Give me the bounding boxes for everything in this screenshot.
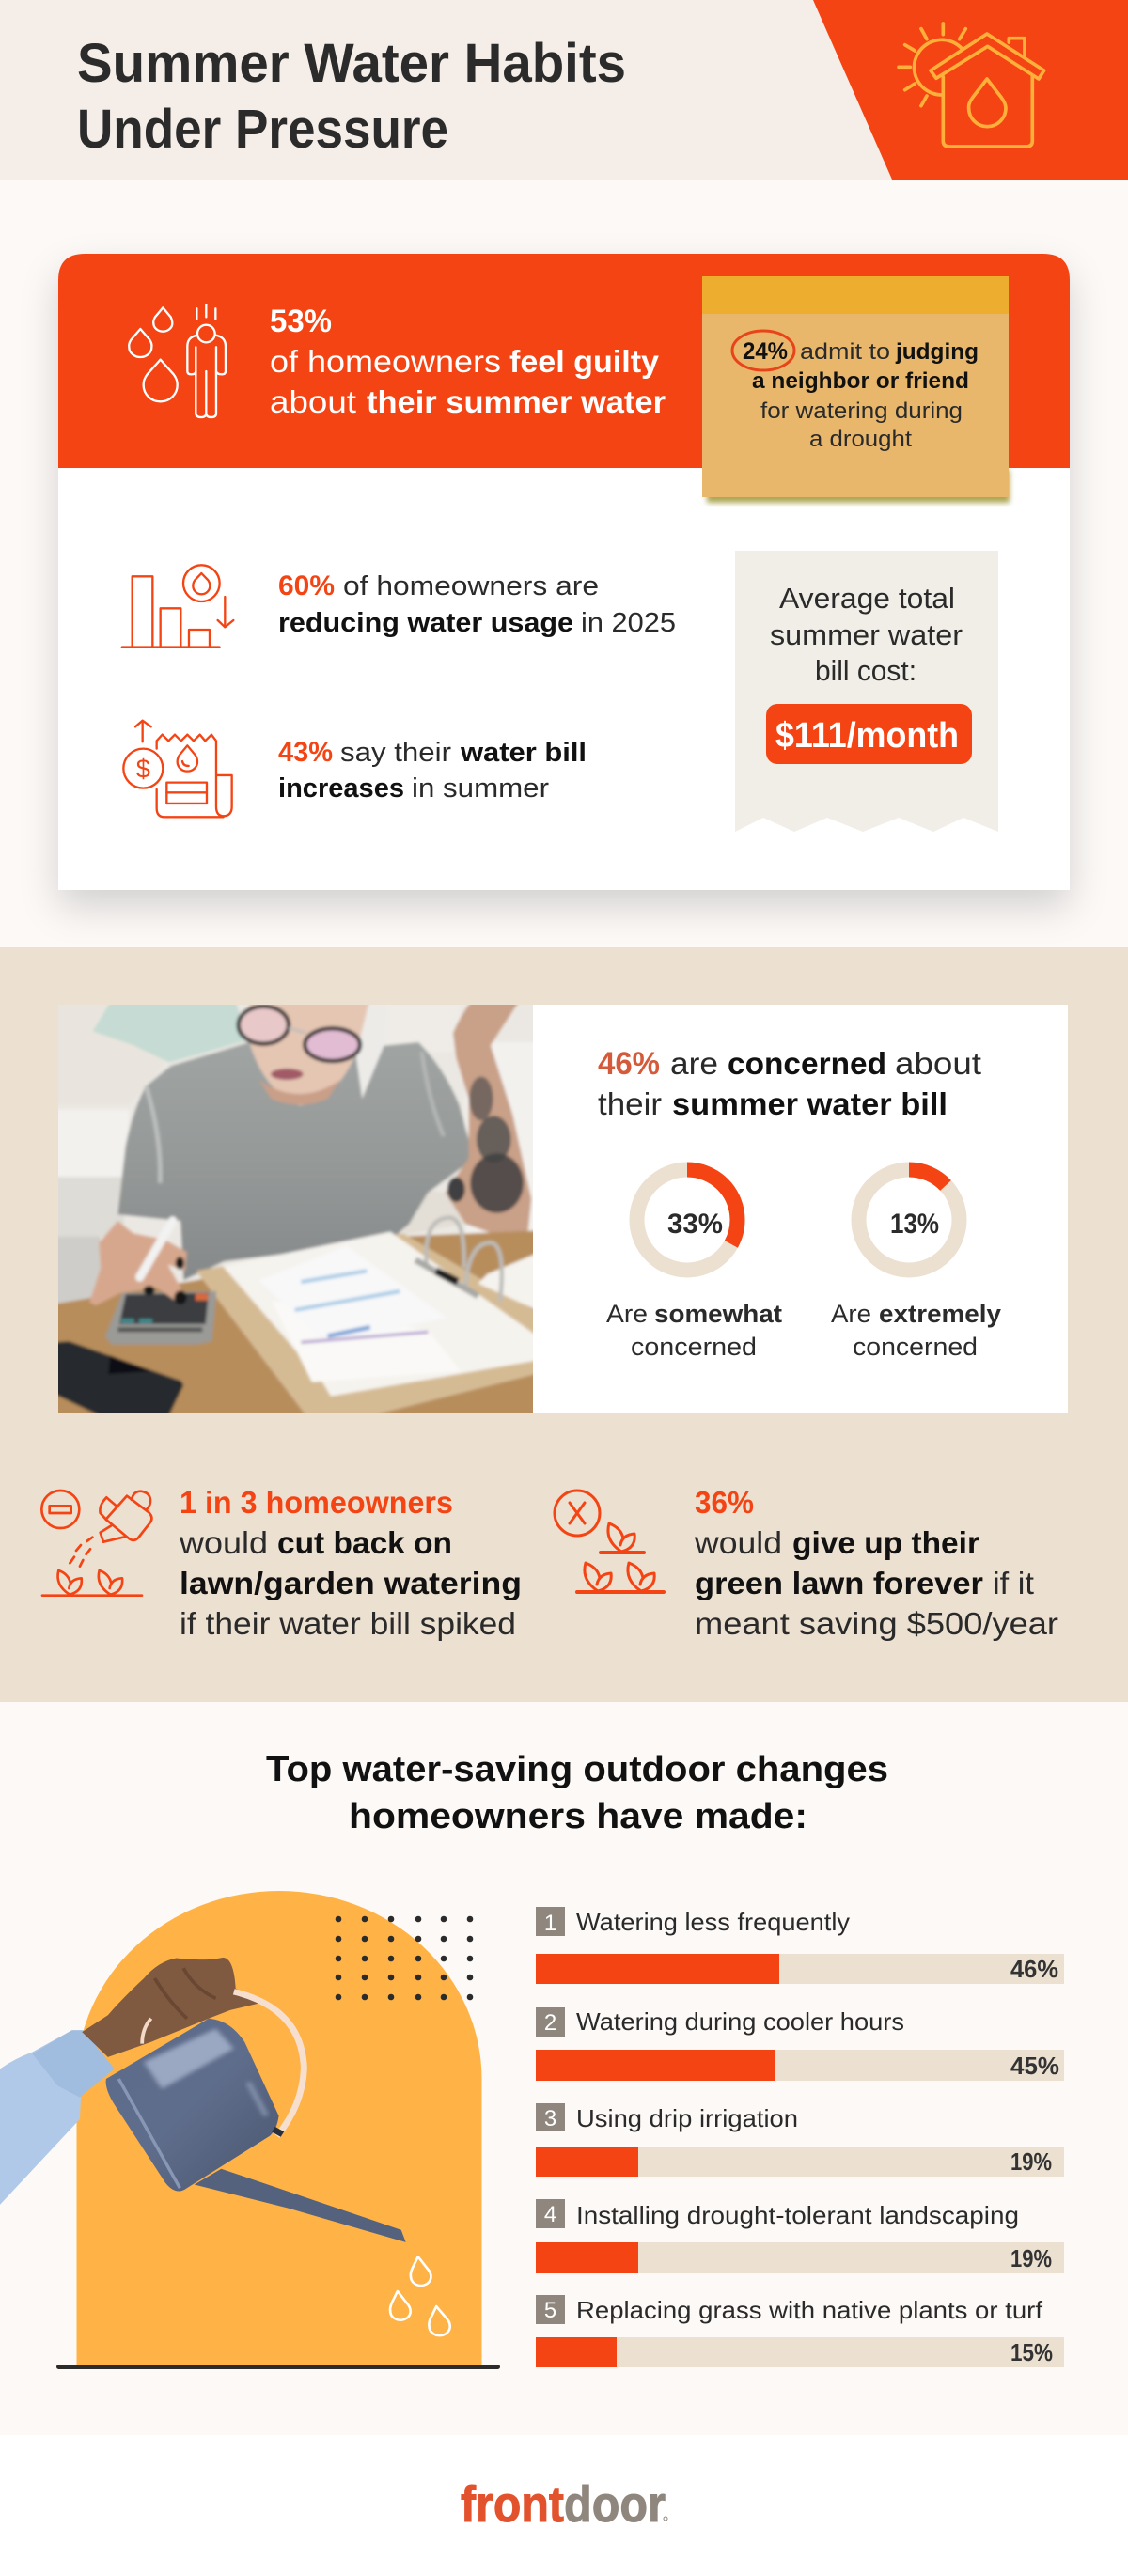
sticky note: 24%: a drought [809, 427, 912, 452]
text: 36% give up lawn [694, 1485, 1058, 1641]
text: 1 in 3 homeowners: lawn/garden watering [180, 1566, 522, 1600]
text: 43% water bill increases: say their [340, 738, 451, 768]
title: Under Pressure [77, 99, 448, 160]
heading: top water-saving changes: homeowners have made: [349, 1797, 807, 1836]
heading: top water-saving changes: Top water-saving outdoor changes [266, 1750, 888, 1789]
text: 46% concerned: 46% [598, 1046, 660, 1082]
title [77, 33, 626, 160]
panel: beige concern section [0, 947, 1128, 1702]
header band [0, 0, 1128, 180]
receipt: average bill cost: Average total [779, 582, 955, 615]
text: 53% feel guilty [270, 304, 666, 419]
photo: woman calculating bills [58, 1005, 533, 1413]
bar 1: 46% [1010, 1955, 1058, 1983]
bar 5: Replacing grass with native plants or turf [576, 2296, 1043, 2324]
text: 53% feel guilty: their summer water [367, 384, 666, 419]
receipt: average bill cost [735, 551, 998, 832]
text: 36% give up lawn: give up their [792, 1525, 979, 1560]
bar 2: 2 [544, 2010, 556, 2036]
sticky note: 24%: for watering during [760, 398, 963, 424]
dot grid [336, 1916, 473, 2000]
text: 36% give up lawn: meant saving $500/year [695, 1606, 1058, 1641]
bar chart: top water-saving changes [536, 1907, 1064, 2367]
bar 2: 45% [1010, 2052, 1059, 2080]
text: 60% reducing water usage: of homeowners are [343, 571, 599, 601]
bar 3: Using drip irrigation [576, 2104, 798, 2132]
bar 1: 1 [544, 1911, 556, 1936]
bar 5: 15% [1010, 2338, 1053, 2366]
text: 46% concerned: are [670, 1046, 718, 1081]
text: 43% water bill increases: 43% [278, 737, 333, 768]
cost badge [766, 704, 972, 764]
text: 1 in 3 homeowners: cut back on [277, 1525, 452, 1560]
icon: no lawn, plants with cross [555, 1491, 664, 1592]
text: 53% feel guilty: feel guilty [509, 344, 660, 379]
icon: sun and house with water drop [899, 23, 1044, 147]
bar 1 [536, 1907, 1064, 1984]
text: 60% reducing water usage [278, 570, 676, 638]
text: 46% concerned: concerned [728, 1046, 886, 1081]
receipt: average bill cost: bill cost: [815, 654, 916, 687]
donut chart: 13% extremely concerned: concerned [853, 1333, 978, 1361]
text: 1 in 3 homeowners: if their water bill spiked [180, 1606, 516, 1641]
icon: water bill with dollar and up arrow: $ [136, 754, 150, 783]
sticky note: 24%: admit to [800, 339, 890, 365]
footer with frontdoor logo [0, 2435, 1128, 2576]
text: 1 in 3 homeowners [179, 1485, 522, 1641]
donut chart: 13% extremely concerned: extremely [879, 1300, 1001, 1328]
icon: reduce watering can and plants [41, 1491, 151, 1596]
footer with frontdoor logo: door [564, 2476, 666, 2533]
text: 60% reducing water usage: 60% [278, 570, 335, 601]
text: 60% reducing water usage: reducing water usage [278, 608, 573, 638]
text: 1 in 3 homeowners: would [179, 1525, 268, 1560]
cost badge: $111/month [776, 716, 959, 756]
bar 4: 4 [544, 2202, 556, 2227]
sticky note: 24%: 24% [743, 338, 788, 365]
text: 43% water bill increases: in summer [412, 773, 549, 804]
hand and watering can [0, 1958, 406, 2242]
text: 36% give up lawn: would [694, 1525, 782, 1560]
icon: falling bar chart with water drop [122, 565, 233, 648]
donut chart: 33% somewhat concerned: concerned [631, 1333, 757, 1361]
bar 3 [536, 2103, 1064, 2177]
receipt: average bill cost: summer water [770, 618, 963, 651]
icon: person with sweat drops [129, 304, 226, 417]
text: 46% concerned: about [895, 1046, 981, 1081]
bar 4: 19% [1010, 2244, 1052, 2272]
text: 53% feel guilty: of homeowners [270, 344, 501, 379]
text: 53% feel guilty: about [270, 384, 356, 419]
title: Summer Water Habits [77, 33, 626, 94]
bar 1: Watering less frequently [576, 1908, 850, 1936]
bar 2 [536, 2007, 1064, 2081]
text: 60% reducing water usage: in 2025 [581, 608, 676, 638]
text: 1 in 3 homeowners: 1 in 3 homeowners [180, 1485, 453, 1520]
text: 46% concerned: their [598, 1086, 662, 1121]
text: 43% water bill increases [278, 737, 587, 804]
text: 53% feel guilty: 53% [270, 304, 332, 339]
heading: top water-saving changes [266, 1750, 888, 1836]
text: 46% concerned [598, 1046, 981, 1121]
bar 3: 19% [1010, 2147, 1052, 2176]
sticky note: 24% [702, 276, 1010, 503]
water drops [390, 2256, 450, 2335]
illustration: hand pouring watering can [0, 1891, 500, 2369]
donut chart: 33% somewhat concerned: somewhat [654, 1300, 782, 1328]
bar 2: Watering during cooler hours [576, 2007, 904, 2036]
donut chart: 33% somewhat concerned: 33% [667, 1209, 723, 1240]
donut chart: 33% somewhat concerned [606, 1169, 782, 1361]
bar 4 [536, 2199, 1064, 2273]
panel: homeowner guilt and bills card [58, 254, 1070, 890]
donut chart: 13% extremely concerned: Are [831, 1300, 871, 1328]
bar 4: Installing drought-tolerant landscaping [576, 2201, 1019, 2229]
text: 36% give up lawn: green lawn forever [695, 1566, 983, 1600]
icon: water bill with dollar and up arrow [123, 721, 232, 817]
text: 43% water bill increases: water bill [460, 738, 587, 768]
donut chart: 33% somewhat concerned: Are [606, 1300, 648, 1328]
footer with frontdoor logo: front [461, 2476, 564, 2533]
bar 3: 3 [544, 2106, 556, 2131]
bar 5: 5 [544, 2298, 556, 2323]
sticky note: 24%: judging [895, 339, 979, 365]
text: 46% concerned: summer water bill [672, 1086, 948, 1121]
bar 5 [536, 2295, 1064, 2367]
arch [77, 1891, 481, 2365]
text: 36% give up lawn: 36% [695, 1485, 754, 1520]
text: 43% water bill increases: increases [278, 773, 404, 804]
sticky note: 24%: a neighbor or friend [752, 368, 969, 394]
donut chart: 13% extremely concerned [831, 1169, 1001, 1361]
ground line [56, 2365, 500, 2369]
donut chart: 13% extremely concerned: 13% [890, 1209, 939, 1240]
text: 36% give up lawn: if it [993, 1566, 1034, 1600]
